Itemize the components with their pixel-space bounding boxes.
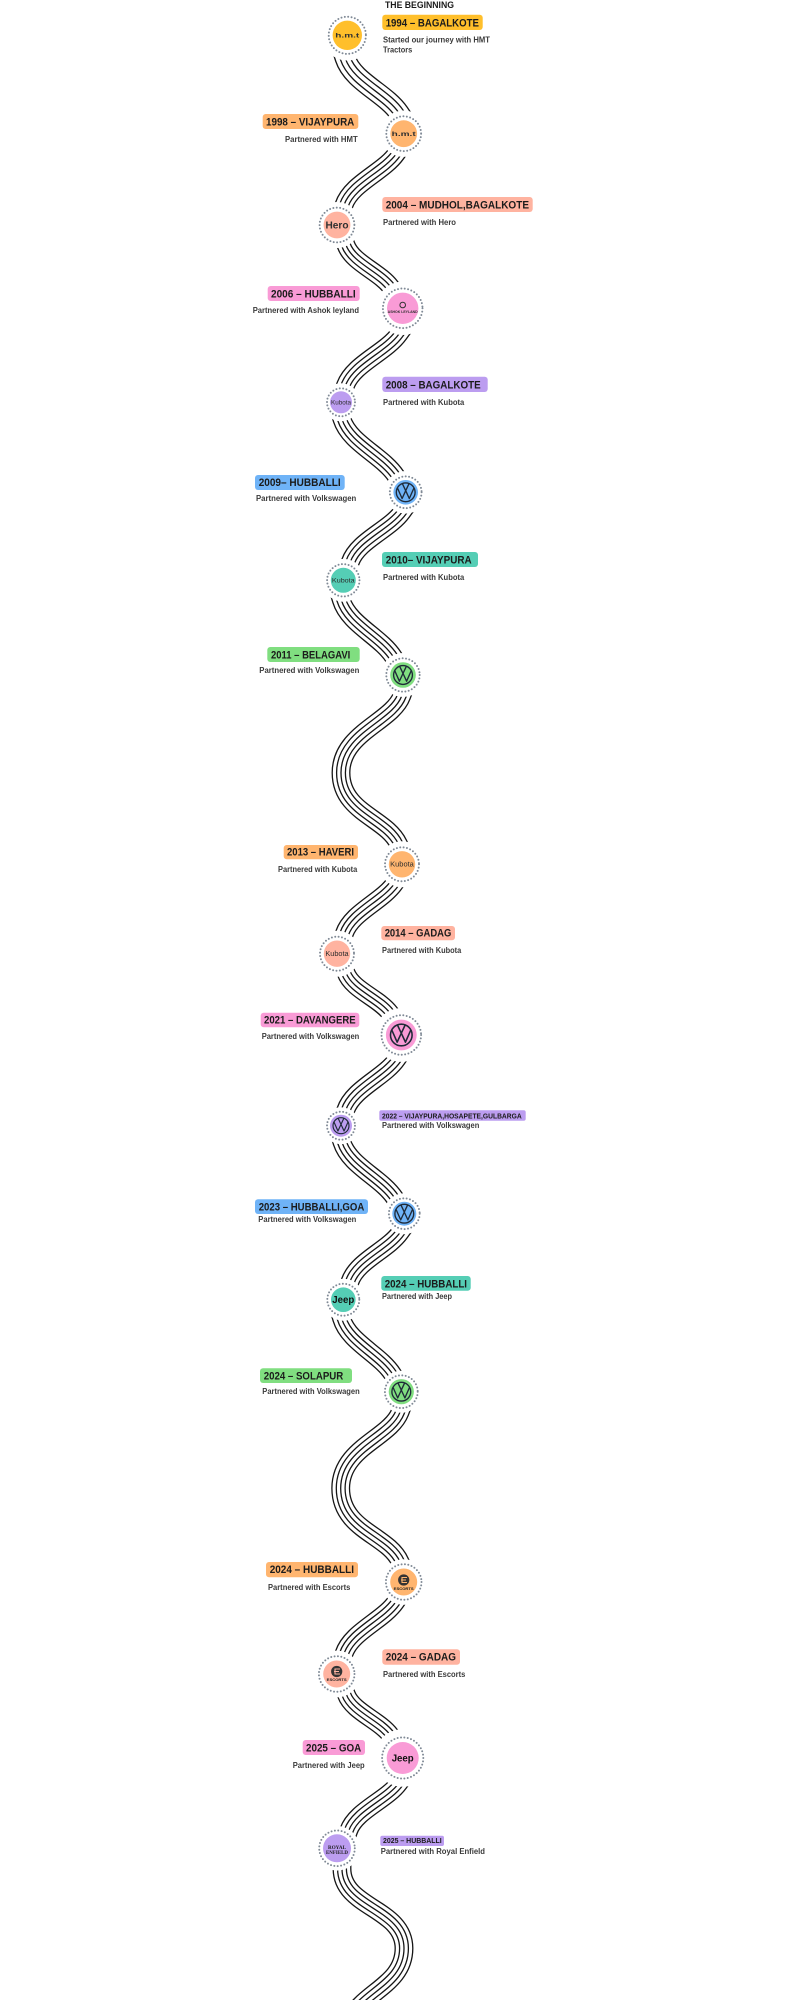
connector: 2024 Hubballi to 2024 Gadag [340,1592,402,1665]
label: 2004 Mudhol, Bagalkote: 2004 – MUDHOL,BAGALKOTE [386,200,529,212]
label: 1994 Bagalkote [382,15,490,54]
connector: 1994 to 1998 [342,47,406,123]
icon: 2014 Kubota node [314,931,360,977]
label: 2024 Solapur: 2024 – SOLAPUR [264,1370,344,1382]
icon: 2008 Kubota node [322,383,360,421]
label: 2009 Hubballi: Partnered with Volkswagen [256,494,356,503]
label: 2023 Hubballi, Goa: 2023 – HUBBALLI,GOA [259,1201,365,1213]
icon: 2010 Kubota node [322,559,365,602]
label: 2006 Hubballi: Partnered with Ashok leyland [253,306,359,315]
icon: 2023 Volkswagen node [384,1193,425,1234]
icon: 2009 Volkswagen node [384,471,427,514]
label: 2024 Solapur: Partnered with Volkswagen [262,1387,360,1396]
label: 2010 Vijaypura: 2010– VIJAYPURA [386,554,472,566]
label: 2021 Davangere: 2021 – DAVANGERE [264,1014,356,1026]
icon: 2013 Kubota node [379,841,425,887]
label: 2004 Mudhol, Bagalkote: Partnered with Hero [383,218,456,227]
icon: 1998 HMT node: h.m.t [392,131,417,138]
label: 2021 Davangere [261,1013,359,1041]
connector: 2025 Hubballi onward [342,1857,404,2000]
icon: 1998 HMT node [380,110,427,157]
label: 2024 Hubballi [381,1276,471,1301]
label: 2024 Hubballi [266,1562,358,1592]
label: 2009 Hubballi [255,475,356,503]
label: 1994 Bagalkote: Started our journey with HMT [383,35,490,44]
icon: 2008 Kubota node: Kubota [331,400,352,406]
icon: 1994 HMT node: h.m.t [335,33,360,40]
icon: 2024 Escorts node: ESCORTS [394,1586,414,1591]
connector: 2006 to 2008 [341,324,406,397]
connector: 2024 Hubballi to 2024 Solapur [338,1307,399,1384]
icon: 2024 Jeep node: Jeep [332,1295,354,1306]
label: 2011 Belagavi [259,647,360,675]
icon: 2013 Kubota node: Kubota [390,862,414,868]
connector: 2009 to 2010 [346,502,409,573]
icon: 2025 Royal Enfield node [315,1826,359,1871]
label: 2013 Haveri: Partnered with Kubota [278,865,358,874]
connector: 2008 to 2009 [338,408,403,486]
connector: 2021 to 2022 [342,1049,404,1122]
label: 2008 Bagalkote: Partnered with Kubota [383,398,465,407]
label: 2021 Davangere: Partnered with Volkswagen [262,1032,359,1041]
icon: 2025 Jeep node [374,1729,432,1787]
icon: 2025 Jeep node: Jeep [392,1753,414,1765]
label: 2014 Gadag: Partnered with Kubota [382,946,462,955]
label: 2024 Hubballi: 2024 – HUBBALLI [270,1564,354,1576]
label: 2009 Hubballi: 2009– HUBBALLI [259,477,341,489]
label: 2006 Hubballi: 2006 – HUBBALLI [271,288,356,300]
label: 2008 Bagalkote [382,377,488,407]
label: 2006 Hubballi [253,286,360,315]
icon: 2021 Volkswagen node [374,1008,428,1062]
label: 2014 Gadag [381,926,462,955]
icon: 2004 Hero node: Hero [326,220,348,232]
icon: 2025 Royal Enfield node: ROYAL [328,1845,346,1851]
label: 2013 Haveri: 2013 – HAVERI [287,846,354,858]
heading: the beginning: THE BEGINNING [385,0,454,10]
icon: 2024 Escorts node: ESCORTS [327,1677,347,1682]
connector: 2025 Goa to 2025 Hubballi [345,1773,406,1842]
label: 2024 Gadag: Partnered with Escorts [383,1670,466,1679]
label: 2014 Gadag: 2014 – GADAG [385,927,451,939]
connector: 2023 to 2024 Hubballi [346,1222,407,1293]
connector: 2010 to 2011 [338,588,400,667]
icon: 2014 Kubota node: Kubota [325,951,349,958]
label: 2025 Hubballi: Partnered with Royal Enfield [381,1847,485,1856]
connector: 2014 to 2021 [342,961,397,1022]
label: 2025 Goa: 2025 – GOA [306,1742,362,1754]
label: 1998 Vijaypura [263,114,358,144]
connector: 2011 to 2013 [341,685,406,854]
label: 2011 Belagavi: Partnered with Volkswagen [259,666,359,675]
icon: 2024 Jeep node [322,1279,364,1321]
label: 2022 Vijaypura, Hosapete, Gulbarga [379,1110,526,1130]
label: 1998 Vijaypura: Partnered with HMT [285,135,358,144]
connector: 2024 Gadag to 2025 Goa [342,1683,398,1745]
label: 2024 Gadag [382,1649,466,1679]
icon: 2025 Royal Enfield node: ENFIELD [326,1850,348,1856]
label: 2022 Vijaypura, Hosapete, Gulbarga: Partnered with Volkswagen [382,1121,479,1130]
label: 2022 Vijaypura, Hosapete, Gulbarga: 2022 – VIJAYPURA,HOSAPETE,GULBARGA [382,1111,522,1120]
label: 2024 Solapur [260,1368,360,1396]
label: 2025 Hubballi [380,1836,485,1856]
label: 2010 Vijaypura: Partnered with Kubota [383,573,465,582]
label: 2024 Hubballi: Partnered with Escorts [268,1583,351,1592]
icon: 1994 HMT node [322,10,372,60]
label: 2013 Haveri [278,845,358,874]
label: 2023 Hubballi, Goa: Partnered with Volkswagen [258,1215,356,1224]
connector: 1998 to 2004 [340,144,403,216]
connector: 2024 Solapur to 2024 Hubballi [341,1401,405,1573]
label: 1994 Bagalkote: 1994 – BAGALKOTE [386,17,479,29]
connector: 2022 to 2023 [338,1131,401,1208]
label: 2011 Belagavi: 2011 – BELAGAVI [271,649,350,661]
icon: 2024 Escorts node [313,1651,360,1697]
label: 2024 Hubballi: 2024 – HUBBALLI [385,1278,467,1290]
label: 2023 Hubballi, Goa [255,1199,368,1224]
icon: 2011 Volkswagen node [381,653,425,697]
label: 2025 Goa: Partnered with Jeep [293,1761,365,1770]
icon: 2004 Hero node [314,202,360,248]
icon: 2010 Kubota node: Kubota [332,578,355,584]
icon: 2006 Ashok Leyland node [376,282,429,335]
label: 1998 Vijaypura: 1998 – VIJAYPURA [266,117,355,129]
connector: 2004 to 2006 [342,234,398,297]
label: 2024 Gadag: 2024 – GADAG [386,1651,456,1663]
icon: 2022 Volkswagen node [322,1107,360,1144]
label: 2025 Hubballi: 2025 – HUBBALLI [383,1836,442,1845]
label: 2008 Bagalkote: 2008 – BAGALKOTE [386,379,481,391]
icon: 2006 Ashok Leyland node: ASHOK LEYLAND [388,310,418,314]
label: 2010 Vijaypura [382,552,478,582]
label: 2004 Mudhol, Bagalkote [382,197,533,227]
icon: 2024 Volkswagen node [380,1371,422,1413]
label: 1994 Bagalkote: Tractors [383,45,413,54]
icon: 2024 Escorts node [381,1559,427,1605]
label: 2024 Hubballi: Partnered with Jeep [382,1292,452,1301]
label: 2025 Goa [293,1740,365,1770]
connector: 2013 to 2014 [340,874,402,945]
